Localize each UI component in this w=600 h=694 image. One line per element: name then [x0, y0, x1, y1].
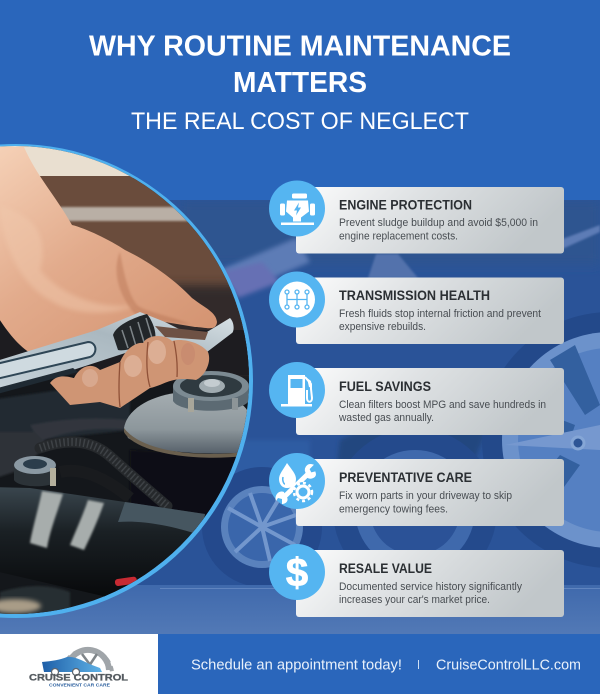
heading: ENGINE PROTECTION [339, 198, 472, 212]
panel: transmission health [269, 272, 564, 344]
engine bay details [0, 390, 237, 530]
title: MATTERS [233, 67, 367, 99]
icon: dollar sign [269, 544, 325, 600]
right wheel [482, 312, 600, 568]
logo: gear [67, 650, 112, 672]
description: Prevent sludge buildup and avoid $5,000 in [339, 217, 538, 229]
logo: car [42, 657, 102, 672]
icon: gear shifter [269, 272, 325, 328]
title [89, 30, 511, 99]
description: expensive rebuilds. [339, 321, 426, 333]
small cap [14, 466, 56, 486]
heading: TRANSMISSION HEALTH [339, 288, 490, 303]
ground [0, 585, 600, 634]
subtitle: THE REAL COST OF NEGLECT [131, 108, 469, 135]
reservoir cap [173, 386, 249, 411]
wrench [0, 312, 234, 392]
heading: PREVENTATIVE CARE [339, 470, 472, 485]
fingers [50, 336, 209, 408]
website: CruiseControlLLC.com [436, 658, 581, 674]
description: Fix worn parts in your driveway to skip [339, 490, 512, 502]
left wheel [202, 467, 322, 587]
description: Fresh fluids stop internal friction and prevent [339, 308, 541, 320]
centre wheel [334, 435, 496, 550]
description: Documented service history significantly [339, 581, 523, 593]
logo: tagline: CONVENIENT CAR CARE [49, 682, 110, 688]
footer bar [0, 634, 600, 694]
panel: resale value [269, 544, 564, 617]
description [339, 581, 523, 606]
call to action: Schedule an appointment today! [191, 658, 402, 674]
hand [0, 147, 217, 356]
description: increases your car's market price. [339, 594, 490, 606]
corrugated hose [40, 442, 167, 506]
description [339, 217, 538, 242]
large air hose [0, 487, 205, 600]
panel: fuel savings [269, 362, 564, 435]
logo panel [0, 634, 158, 694]
photo backdrop [0, 140, 260, 620]
description: wasted gas annually. [338, 412, 434, 424]
icon: drop, wrench and gear [269, 453, 325, 509]
description: engine replacement costs. [339, 230, 458, 242]
icon: fuel pump [269, 362, 325, 418]
logo: wrenches [82, 654, 97, 666]
panel: preventative care [269, 453, 564, 526]
panel: engine protection [269, 180, 564, 254]
title: WHY ROUTINE MAINTENANCE [89, 30, 511, 62]
icon: engine [269, 180, 325, 236]
logo: wordmark: CRUISE CONTROL [29, 672, 128, 684]
description [339, 308, 541, 333]
description: emergency towing fees. [339, 504, 448, 516]
logo: wheels [52, 668, 80, 676]
description [338, 399, 546, 424]
heading: FUEL SAVINGS [339, 379, 431, 394]
separator [418, 660, 419, 669]
reservoir dome [124, 392, 250, 453]
background: blue-tinted car photo [0, 200, 600, 634]
photo: mechanic's hand with wrench over engine bay [0, 140, 260, 620]
icon: dollar sign: $ [286, 551, 308, 595]
description: Clean filters boost MPG and save hundreds in [339, 399, 546, 411]
description [339, 490, 512, 516]
heading: RESALE VALUE [339, 561, 432, 576]
